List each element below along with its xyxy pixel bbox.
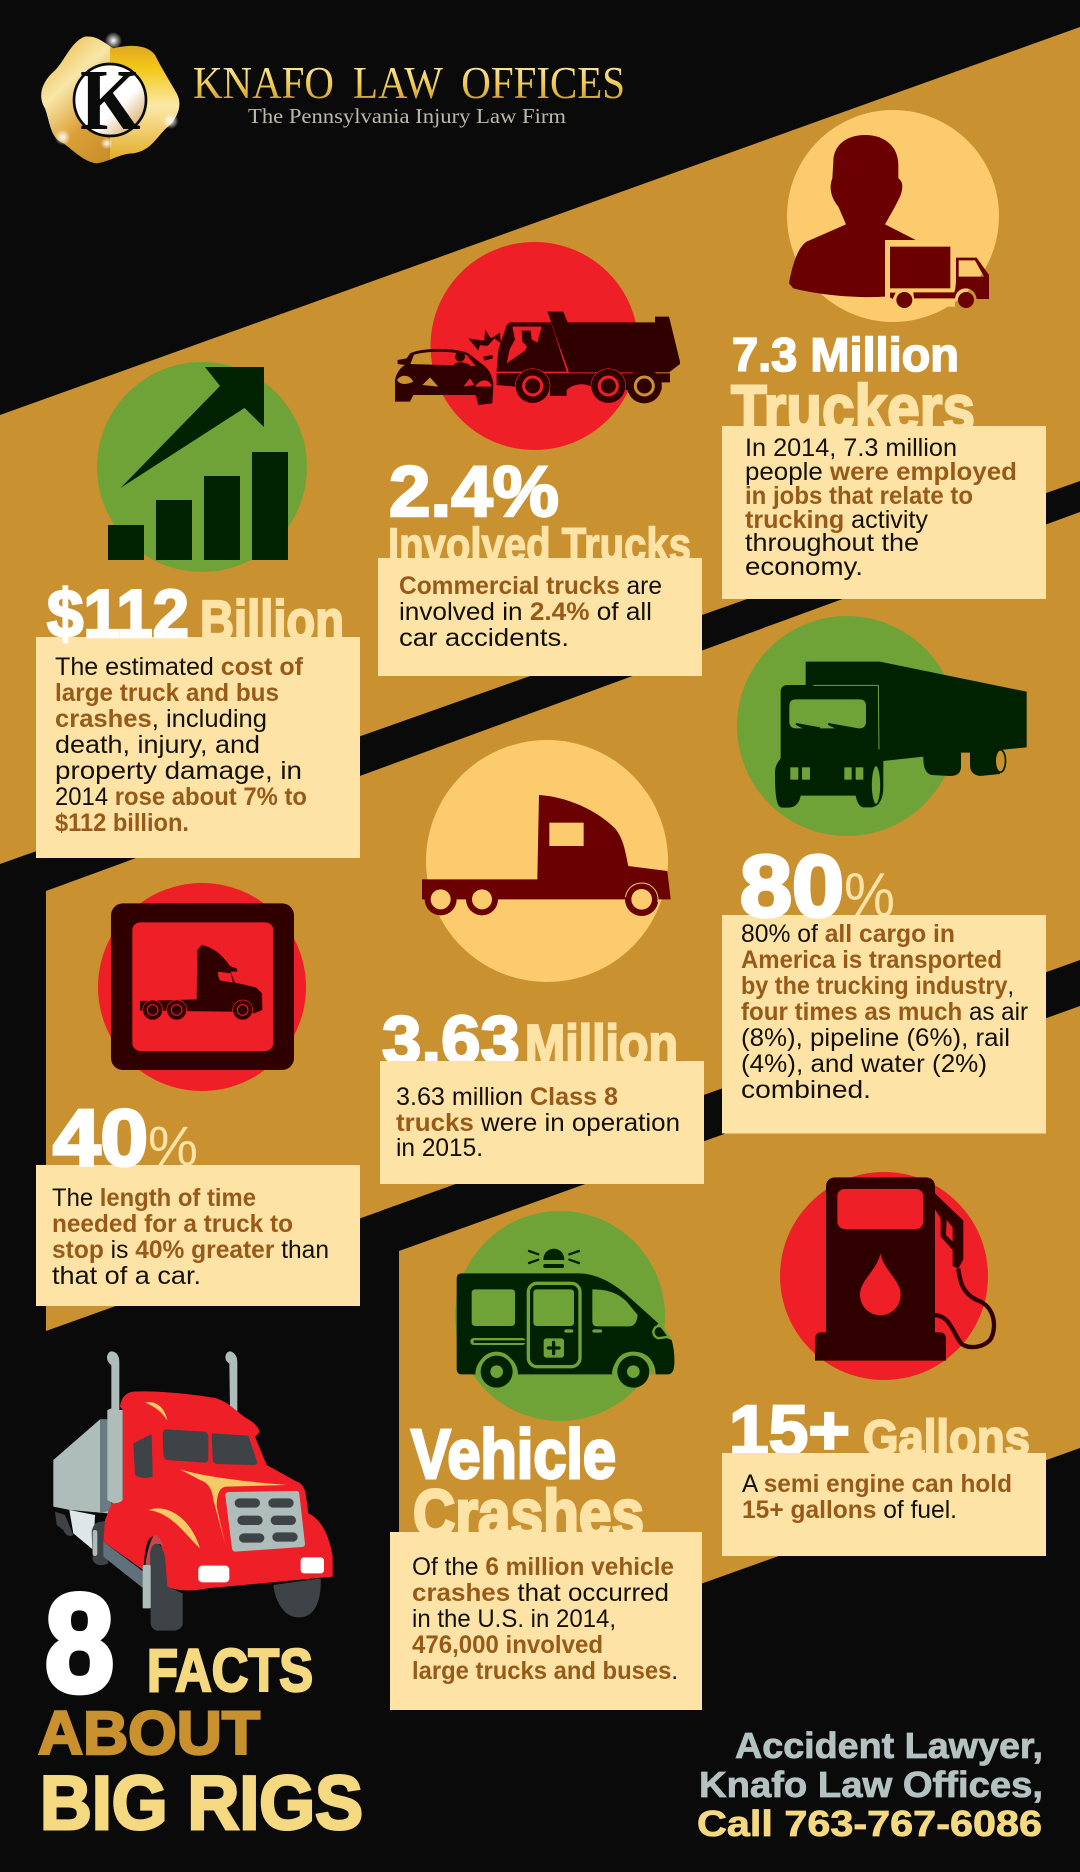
heading: Truckers: Truckers: [731, 371, 975, 445]
heading: Crashes: Crashes: [413, 1476, 644, 1552]
heading: 3.63: 3.63: [382, 1002, 520, 1078]
text box: truckers: economy.: [745, 553, 863, 581]
text box: vehicle crashes: Of the 6 million vehicle: [412, 1553, 674, 1581]
text box: cost of crashes: [36, 637, 360, 858]
text box: cargo share: by the trucking industry,: [741, 972, 1014, 1000]
panel: vehicle crashes: [390, 1211, 702, 1710]
text box: cargo share: combined.: [741, 1076, 871, 1104]
heading: 7.3 Million: 7.3 Million: [732, 328, 959, 381]
heading: 80: 80: [740, 838, 844, 935]
panel: 7.3 million truckers: [722, 110, 1046, 599]
illustration: red big rig truck: [53, 1351, 333, 1631]
text box: stopping time: that of a car.: [52, 1262, 201, 1290]
contact block: [697, 1725, 1043, 1844]
text box: vehicle crashes: in the U.S. in 2014,: [412, 1605, 616, 1633]
icon: semi tractor side view: [422, 740, 671, 982]
text box: stopping time: stop is 40% greater than: [52, 1236, 329, 1264]
text box: cargo share: America is transported: [741, 946, 1002, 974]
text box: cost of crashes: large truck and bus: [55, 679, 279, 707]
text box: stopping time: [36, 1165, 360, 1306]
text box: class 8 trucks: [380, 1061, 704, 1184]
heading: $112: $112: [47, 576, 189, 652]
text box: cost of crashes: property damage, in: [55, 757, 302, 785]
icon: growth bar chart with arrow: [97, 362, 307, 572]
text box: vehicle crashes: 476,000 involved: [412, 1631, 603, 1659]
panel: 3.63 million class 8: [380, 740, 704, 1184]
text box: vehicle crashes: [390, 1532, 702, 1710]
heading: Involved Trucks: Involved Trucks: [388, 518, 691, 571]
text box: truckers: throughout the: [745, 529, 919, 557]
text box: involved trucks: car accidents.: [399, 624, 569, 652]
heading: percent sign: %: [844, 861, 895, 930]
text box: cargo share: (4%), and water (2%): [741, 1050, 987, 1078]
text box: cargo share: (8%), pipeline (6%), rail: [741, 1024, 1010, 1052]
text box: cost of crashes: The estimated cost of: [55, 653, 304, 681]
text box: vehicle crashes: large trucks and buses.: [412, 1657, 678, 1685]
text box: fuel capacity: A semi engine can hold: [742, 1470, 1012, 1498]
panel: 15+ gallons: [722, 1172, 1046, 1556]
icon: ambulance: [455, 1211, 674, 1421]
text box: class 8 trucks: 3.63 million Class 8: [396, 1083, 618, 1111]
heading: 2.4%: 2.4%: [389, 453, 559, 532]
title word: ABOUT: ABOUT: [38, 1699, 260, 1767]
text box: cost of crashes: crashes, including: [55, 705, 267, 733]
text box: truckers: in jobs that relate to: [745, 482, 973, 510]
icon: car and truck collision: [395, 242, 680, 450]
contact line: phone number: Call 763-767-6086: [697, 1803, 1042, 1844]
text box: class 8 trucks: in 2015.: [396, 1134, 483, 1162]
panel: 40% stopping distance: [36, 883, 360, 1306]
heading: Billion: Billion: [200, 589, 344, 653]
logo: Knafo Law Offices: [41, 32, 625, 163]
title: 8 Facts About Big Rigs: [38, 1566, 363, 1846]
text box: class 8 trucks: trucks were in operation: [396, 1109, 680, 1137]
icon: gold seal with K: K: [80, 51, 141, 148]
text box: truckers: In 2014, 7.3 million: [745, 434, 957, 462]
text box: cargo share: 80% of all cargo in: [741, 920, 955, 948]
text box: cargo share: [722, 915, 1046, 1134]
contact line: Knafo Law Offices: Knafo Law Offices,: [699, 1764, 1043, 1805]
title words: BIG RIGS: BIG RIGS: [40, 1761, 363, 1846]
heading: 15+: 15+: [729, 1391, 850, 1469]
icon: fuel pump: [780, 1172, 994, 1380]
contact line: Accident Lawyer: Accident Lawyer,: [735, 1725, 1043, 1766]
text box: involved trucks: involved in 2.4% of all: [399, 598, 652, 626]
text box: truckers: trucking activity: [745, 506, 928, 534]
logo wordmark: KNAFO LAW OFFICES: [193, 57, 625, 108]
text box: cost of crashes: $112 billion.: [55, 809, 189, 837]
heading: Vehicle: Vehicle: [411, 1415, 616, 1493]
text box: fuel capacity: 15+ gallons of fuel.: [742, 1496, 957, 1524]
panel: $112 billion: [36, 362, 360, 858]
text box: stopping time: needed for a truck to: [52, 1210, 293, 1238]
heading: Gallons: Gallons: [863, 1410, 1030, 1466]
text box: involved trucks: Commercial trucks are: [399, 572, 662, 600]
icon: cargo truck front view: [737, 616, 1027, 836]
panel: 2.4% involved trucks: [378, 242, 702, 676]
text box: cost of crashes: 2014 rose about 7% to: [55, 783, 307, 811]
heading: percent sign: %: [148, 1114, 198, 1177]
icon: truck road sign: [98, 883, 306, 1091]
text box: truckers: [722, 426, 1046, 599]
text box: vehicle crashes: crashes that occurred: [412, 1579, 669, 1607]
text box: truckers: people were employed: [745, 458, 1017, 486]
text box: cost of crashes: death, injury, and: [55, 731, 260, 759]
heading: Million: Million: [525, 1013, 678, 1075]
heading: 40: 40: [53, 1093, 148, 1182]
logo tagline: The Pennsylvania Injury Law Firm: [248, 104, 566, 128]
title number 8: 8: [45, 1566, 114, 1721]
text box: involved trucks: [378, 558, 702, 676]
icon: trucker silhouette: [787, 110, 999, 322]
title word: FACTS: FACTS: [147, 1637, 313, 1704]
text box: fuel capacity: [722, 1453, 1046, 1556]
icon: gold seal with K: [41, 32, 179, 163]
text box: cargo share: four times as much as air: [741, 998, 1028, 1026]
text box: stopping time: The length of time: [52, 1184, 256, 1212]
panel: 80% of cargo: [722, 616, 1046, 1134]
